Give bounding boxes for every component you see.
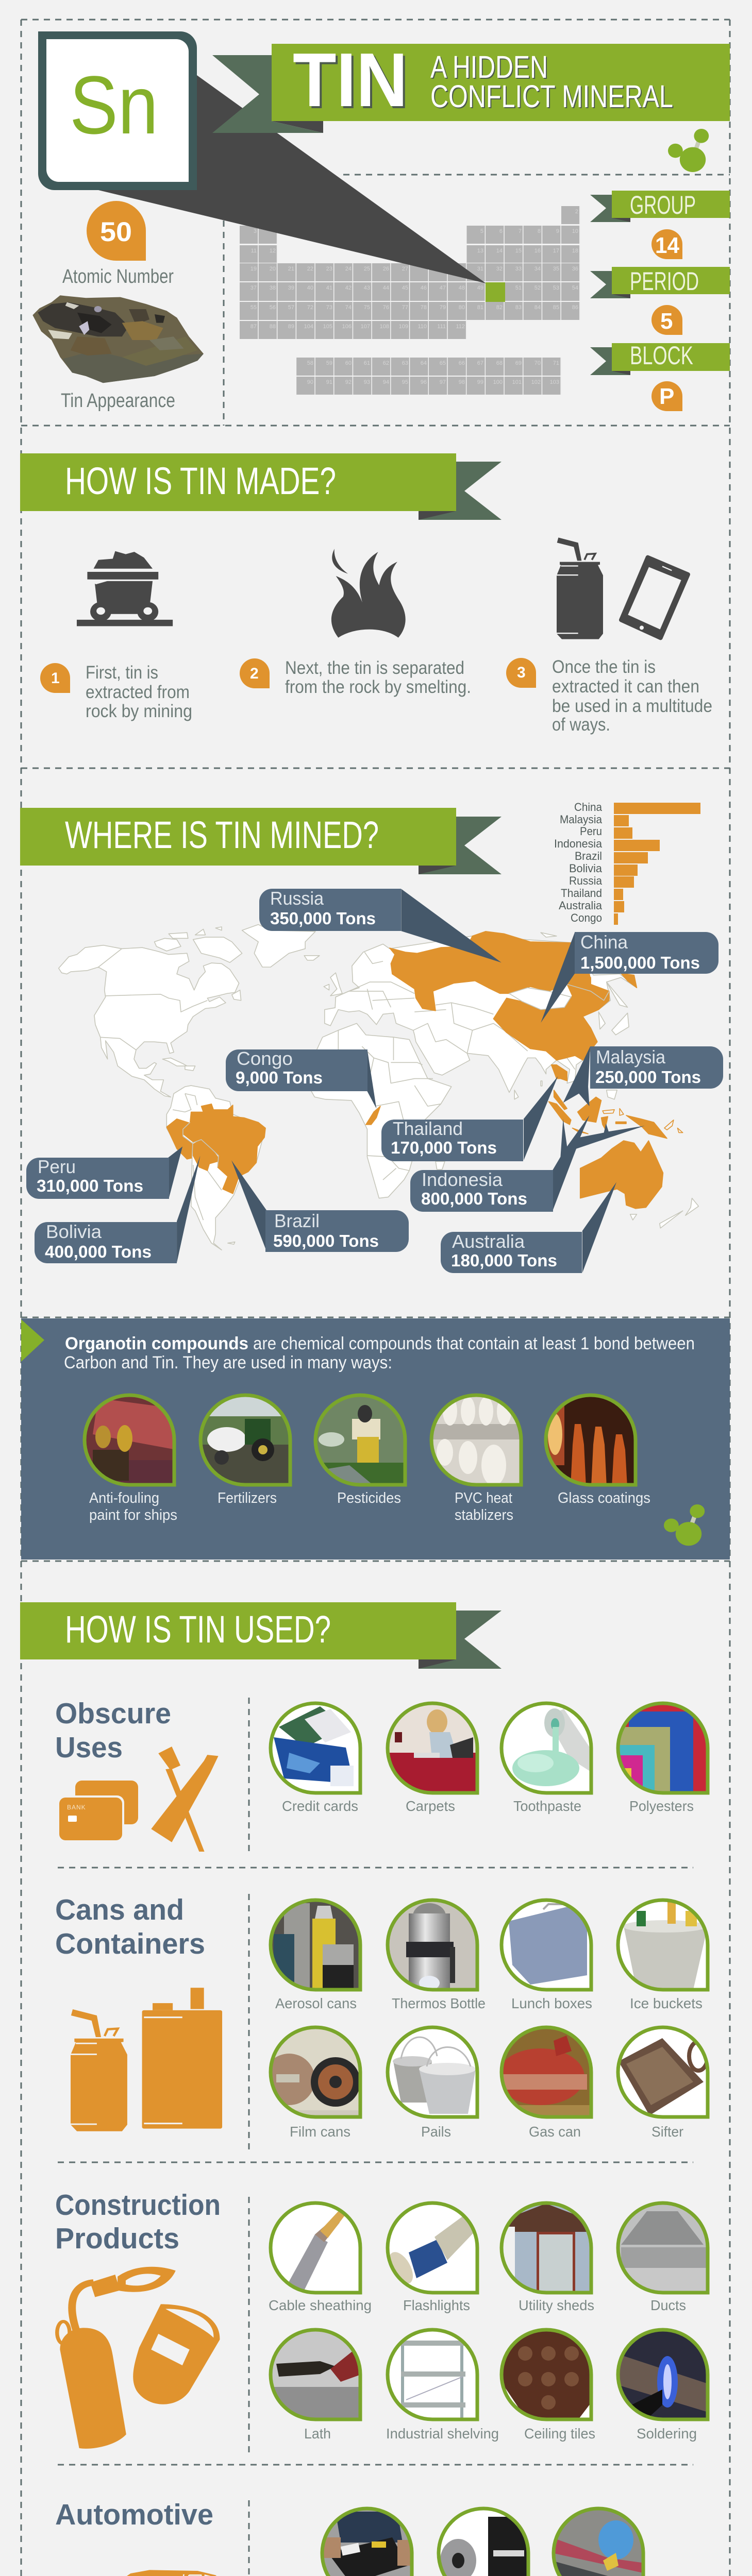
periodic table: 40 bbox=[307, 285, 313, 291]
periodic table: 48 bbox=[459, 285, 465, 291]
periodic table: 3 bbox=[254, 228, 257, 234]
periodic table: 17 bbox=[553, 248, 559, 254]
icon: toothbrush and toothpaste bbox=[151, 1747, 219, 1852]
step 1 bbox=[40, 663, 192, 721]
periodic table: 13 bbox=[477, 248, 483, 254]
periodic table: 73 bbox=[326, 304, 332, 311]
panel: obscure uses bbox=[55, 1697, 710, 1853]
icon: flame bbox=[331, 549, 406, 638]
item: sifter bbox=[616, 2025, 710, 2140]
periodic table: 100 bbox=[493, 379, 503, 385]
label: atomic number: Atomic Number bbox=[62, 266, 174, 287]
periodic table: 74 bbox=[345, 304, 352, 311]
item: flashlights bbox=[384, 2201, 479, 2313]
callout: Peru bbox=[26, 1146, 182, 1199]
callout: Peru: 310,000 Tons bbox=[37, 1176, 143, 1195]
step 3: extracted it can then bbox=[552, 676, 699, 697]
item: credit cards bbox=[269, 1701, 362, 1814]
item: ice buckets: Ice buckets bbox=[630, 1995, 703, 2011]
item: anti-fouling paint: Anti-fouling bbox=[89, 1490, 159, 1506]
periodic table: 7 bbox=[519, 228, 522, 234]
period ribbon bbox=[590, 267, 730, 298]
label: tin appearance: Tin Appearance bbox=[61, 390, 175, 412]
heading: Containers bbox=[55, 1927, 205, 1960]
icon: can bbox=[71, 2009, 127, 2131]
periodic table: 79 bbox=[440, 304, 446, 311]
bar chart: tin reserves by country: Bolivia bbox=[569, 862, 603, 875]
bar chart: tin reserves by country: Thailand bbox=[561, 887, 602, 900]
item: soldering: Soldering bbox=[637, 2426, 697, 2442]
title banner bbox=[212, 38, 730, 133]
icon: credit cards: BANK bbox=[67, 1804, 86, 1811]
item: fertilizers: Fertilizers bbox=[218, 1490, 277, 1506]
periodic table: 39 bbox=[288, 285, 294, 291]
icon: SUV bbox=[37, 2570, 236, 2576]
item: industrial shelving bbox=[386, 2328, 499, 2442]
group value badge: 14 bbox=[655, 233, 679, 258]
periodic table: 97 bbox=[440, 379, 446, 385]
heading: how is tin used bbox=[20, 1602, 502, 1669]
bar chart: tin reserves by country: Malaysia bbox=[560, 813, 603, 826]
organotin intro text: Organotin compounds bbox=[65, 1334, 248, 1353]
periodic table: 108 bbox=[380, 324, 389, 330]
bar chart: tin reserves by country: Australia bbox=[559, 899, 603, 912]
item: pesticides bbox=[313, 1393, 407, 1506]
periodic table: 42 bbox=[345, 285, 352, 291]
item: pails: Pails bbox=[421, 2124, 451, 2140]
heading: where is tin mined bbox=[20, 808, 502, 874]
periodic table: 85 bbox=[553, 304, 559, 311]
group ribbon: GROUP bbox=[630, 191, 696, 219]
heading: how is tin made: HOW IS TIN MADE? bbox=[65, 460, 336, 502]
item: lath bbox=[269, 2328, 362, 2442]
callout: Thailand: Thailand bbox=[393, 1118, 463, 1139]
item: PVC heat stabilizers: PVC heat bbox=[455, 1490, 512, 1506]
icon: welding helmet bbox=[133, 2304, 220, 2404]
item: ducts: Ducts bbox=[650, 2297, 686, 2313]
item: aerosol cans bbox=[269, 1898, 362, 2011]
tin rock illustration bbox=[32, 295, 204, 383]
item: lunch boxes bbox=[499, 1898, 593, 2011]
item: utility sheds bbox=[499, 2201, 594, 2313]
periodic table: 8 bbox=[538, 228, 541, 234]
periodic table: 16 bbox=[534, 248, 541, 254]
periodic table: 32 bbox=[496, 266, 503, 272]
item: lunch boxes: Lunch boxes bbox=[511, 1995, 592, 2011]
panel: construction products bbox=[55, 2189, 710, 2455]
item: gas can: Gas can bbox=[529, 2124, 581, 2140]
icon: fuel can bbox=[142, 1988, 222, 2129]
periodic table: 23 bbox=[326, 266, 332, 272]
step 2: 2 bbox=[250, 665, 259, 682]
periodic table: 93 bbox=[364, 379, 370, 385]
bar chart: tin reserves by country: Brazil bbox=[575, 850, 602, 862]
periodic table: 52 bbox=[534, 285, 541, 291]
organotin intro text: Carbon and Tin. They are used in many ways: bbox=[64, 1353, 392, 1372]
item: lath: Lath bbox=[304, 2426, 331, 2442]
periodic table: 22 bbox=[307, 266, 313, 272]
item: ducts bbox=[616, 2201, 710, 2313]
periodic table: 71 bbox=[553, 360, 559, 366]
periodic table: 44 bbox=[383, 285, 389, 291]
item: credit cards: Credit cards bbox=[282, 1798, 358, 1814]
heading bbox=[55, 1697, 171, 1764]
periodic table: 107 bbox=[361, 324, 370, 330]
callout: Bolivia bbox=[35, 1156, 200, 1263]
bar chart: tin reserves by country: Peru bbox=[580, 825, 602, 838]
periodic table: 106 bbox=[342, 324, 352, 330]
periodic table: 66 bbox=[459, 360, 465, 366]
callout: Malaysia: Malaysia bbox=[596, 1046, 666, 1067]
periodic table: 103 bbox=[550, 379, 559, 385]
element tile: Sn bbox=[38, 31, 197, 190]
callout: Thailand: 170,000 Tons bbox=[391, 1138, 497, 1157]
periodic table: 5 bbox=[480, 228, 483, 234]
periodic table: 82 bbox=[496, 304, 503, 311]
icon: molecule bbox=[664, 1504, 705, 1546]
periodic table: 21 bbox=[288, 266, 294, 272]
item: film cans bbox=[263, 2025, 362, 2140]
callout: China: China bbox=[580, 931, 628, 953]
periodic table: 31 bbox=[477, 266, 483, 272]
heading: where is tin mined: WHERE IS TIN MINED? bbox=[65, 814, 379, 856]
periodic table: 105 bbox=[323, 324, 332, 330]
periodic table: 41 bbox=[326, 285, 332, 291]
periodic table: 36 bbox=[572, 266, 578, 272]
periodic table: 47 bbox=[440, 285, 446, 291]
periodic table: 64 bbox=[421, 360, 427, 366]
step 3: be used in a multitude bbox=[552, 696, 712, 716]
heading: how is tin made bbox=[20, 453, 502, 520]
period value badge bbox=[651, 305, 682, 335]
step 1: First, tin is bbox=[86, 663, 158, 683]
callout: China bbox=[541, 931, 718, 1023]
icon: blowtorch bbox=[57, 2267, 176, 2449]
periodic table: 111 bbox=[437, 324, 446, 330]
item: polyesters: Polyesters bbox=[629, 1798, 694, 1814]
periodic table: 24 bbox=[345, 266, 352, 272]
callout: Thailand bbox=[381, 1076, 558, 1161]
callout: Russia: Russia bbox=[270, 888, 324, 909]
periodic table: 101 bbox=[512, 379, 522, 385]
step 2 bbox=[240, 658, 471, 697]
callout: Congo: Congo bbox=[237, 1048, 293, 1069]
callout: Brazil: 590,000 Tons bbox=[273, 1231, 379, 1250]
heading bbox=[55, 1893, 205, 1960]
callout: Australia: 180,000 Tons bbox=[451, 1251, 557, 1270]
periodic table: 54 bbox=[572, 285, 578, 291]
panel: organotin compounds bbox=[21, 1317, 730, 1561]
heading: Uses bbox=[55, 1731, 123, 1764]
item: PVC heat stabilizers bbox=[429, 1393, 523, 1523]
title banner: CONFLICT MINERAL bbox=[430, 79, 673, 114]
panel: cans and containers bbox=[55, 1893, 710, 2153]
periodic table: 11 bbox=[251, 248, 257, 254]
callout: Bolivia: Bolivia bbox=[46, 1221, 102, 1242]
callout: China: 1,500,000 Tons bbox=[580, 953, 700, 972]
bar chart: tin reserves by country: Congo bbox=[571, 911, 602, 924]
atomic number badge: 50 bbox=[100, 217, 132, 247]
icon: can and phone bbox=[557, 537, 688, 639]
callout: Congo bbox=[226, 1048, 376, 1109]
periodic table: 78 bbox=[421, 304, 427, 311]
item: pesticides: Pesticides bbox=[337, 1490, 401, 1506]
periodic table bbox=[240, 206, 580, 395]
periodic table: 10 bbox=[572, 228, 578, 234]
callout: Australia: Australia bbox=[452, 1231, 525, 1252]
block value badge bbox=[651, 381, 682, 411]
periodic table: 72 bbox=[307, 304, 313, 311]
item: pails bbox=[386, 2025, 479, 2140]
block value badge: P bbox=[659, 384, 674, 409]
callout: Brazil: Brazil bbox=[274, 1210, 320, 1231]
callout: Indonesia bbox=[410, 1115, 645, 1212]
callout: Congo: 9,000 Tons bbox=[236, 1068, 323, 1087]
periodic table: 92 bbox=[345, 379, 352, 385]
icon: molecule bbox=[668, 129, 709, 172]
item: glass coatings: Glass coatings bbox=[558, 1490, 650, 1506]
item: industrial shelving: Industrial shelving bbox=[386, 2426, 499, 2442]
periodic table: 25 bbox=[364, 266, 370, 272]
world map bbox=[59, 925, 698, 1250]
step 1: rock by mining bbox=[86, 701, 192, 721]
periodic table: 112 bbox=[456, 324, 465, 330]
periodic table: 86 bbox=[572, 304, 578, 311]
item: carpets bbox=[386, 1701, 479, 1814]
organotin intro text bbox=[64, 1334, 695, 1372]
heading bbox=[55, 2189, 221, 2255]
periodic table: 33 bbox=[515, 266, 522, 272]
periodic table: 109 bbox=[399, 324, 408, 330]
periodic table: 89 bbox=[288, 324, 294, 330]
period ribbon: PERIOD bbox=[630, 267, 699, 296]
callout: Indonesia: Indonesia bbox=[422, 1169, 503, 1190]
periodic table: 88 bbox=[270, 324, 276, 330]
periodic table: 90 bbox=[307, 379, 313, 385]
callout: Russia bbox=[259, 888, 502, 962]
step 3 bbox=[506, 657, 712, 735]
bar chart: tin reserves by country: Indonesia bbox=[554, 837, 603, 850]
step 2: from the rock by smelting. bbox=[285, 677, 471, 697]
item: ice buckets bbox=[616, 1898, 710, 2011]
periodic table: 102 bbox=[531, 379, 541, 385]
bar chart: tin reserves by country bbox=[554, 801, 700, 925]
atomic number badge bbox=[87, 201, 146, 261]
callout: Russia: 350,000 Tons bbox=[270, 909, 376, 928]
periodic table: 68 bbox=[496, 360, 503, 366]
heading: Products bbox=[55, 2222, 179, 2255]
periodic table: 27 bbox=[402, 266, 408, 272]
periodic table: 9 bbox=[556, 228, 559, 234]
item: gas can bbox=[497, 2025, 593, 2140]
group value badge bbox=[651, 229, 682, 259]
period value badge: 5 bbox=[660, 309, 673, 334]
item: PVC heat stabilizers: stablizers bbox=[455, 1507, 513, 1523]
periodic table: 67 bbox=[477, 360, 483, 366]
periodic table: 60 bbox=[345, 360, 352, 366]
periodic table: 6 bbox=[499, 228, 503, 234]
bar chart: tin reserves by country: Russia bbox=[569, 874, 603, 887]
callout: Peru: Peru bbox=[38, 1156, 76, 1177]
periodic table: 95 bbox=[402, 379, 408, 385]
item: toothpaste: Toothpaste bbox=[513, 1798, 581, 1814]
item: anti-fouling paint: paint for ships bbox=[89, 1507, 177, 1523]
item: cable sheathing: Cable sheathing bbox=[269, 2297, 372, 2313]
heading: Obscure bbox=[55, 1697, 171, 1730]
heading: Cans and bbox=[55, 1893, 184, 1926]
step 3: Once the tin is bbox=[552, 657, 656, 677]
periodic table: 75 bbox=[364, 304, 370, 311]
group ribbon bbox=[590, 191, 730, 222]
periodic table: 110 bbox=[417, 324, 427, 330]
periodic table: 87 bbox=[250, 324, 257, 330]
block ribbon: BLOCK bbox=[630, 341, 693, 370]
periodic table: 104 bbox=[304, 324, 313, 330]
item: oil filters bbox=[437, 2506, 530, 2576]
periodic table: 98 bbox=[459, 379, 465, 385]
step 3: 3 bbox=[517, 664, 526, 681]
step 2: Next, the tin is separated bbox=[285, 658, 464, 678]
periodic table: 53 bbox=[553, 285, 559, 291]
panel: automotive bbox=[37, 2498, 662, 2576]
periodic table: 84 bbox=[534, 304, 541, 311]
item: battery tops bbox=[320, 2506, 414, 2576]
periodic table: 76 bbox=[383, 304, 389, 311]
callout: Indonesia: 800,000 Tons bbox=[421, 1189, 527, 1208]
periodic table: 4 bbox=[273, 228, 276, 234]
callout: Malaysia bbox=[563, 1046, 723, 1106]
heading: Automotive bbox=[55, 2498, 213, 2531]
callout: Malaysia: 250,000 Tons bbox=[595, 1067, 701, 1087]
item: anti-fouling paint bbox=[82, 1393, 177, 1523]
periodic table: 15 bbox=[515, 248, 522, 254]
periodic table: 57 bbox=[288, 304, 294, 311]
periodic table: 56 bbox=[270, 304, 276, 311]
item: film cans: Film cans bbox=[290, 2124, 350, 2140]
periodic table: 43 bbox=[364, 285, 370, 291]
item: ceiling tiles: Ceiling tiles bbox=[524, 2426, 595, 2442]
periodic table: 80 bbox=[459, 304, 465, 311]
periodic table: 51 bbox=[515, 285, 522, 291]
periodic table: 55 bbox=[250, 304, 257, 311]
step 3: of ways. bbox=[552, 715, 610, 735]
icon: mine cart bbox=[77, 551, 173, 626]
item: cable sheathing bbox=[269, 2201, 372, 2313]
periodic table: 37 bbox=[250, 285, 257, 291]
periodic table: 77 bbox=[402, 304, 408, 311]
item: thermos bottle bbox=[386, 1898, 486, 2011]
item: aerosol cans: Aerosol cans bbox=[275, 1995, 357, 2011]
periodic table: 91 bbox=[326, 379, 332, 385]
periodic table: 59 bbox=[326, 360, 332, 366]
periodic table: 18 bbox=[572, 248, 578, 254]
title banner: TIN bbox=[293, 38, 408, 123]
organotin intro text: are chemical compounds that contain at least 1 bond between bbox=[253, 1334, 695, 1353]
item: fertilizers bbox=[198, 1393, 292, 1506]
periodic table: 99 bbox=[477, 379, 483, 385]
periodic table: 14 bbox=[496, 248, 503, 254]
periodic table: 58 bbox=[307, 360, 313, 366]
bar chart: tin reserves by country: China bbox=[574, 801, 603, 814]
pointer wedge from element tile to tin cell bbox=[98, 75, 486, 283]
element tile: Sn: Sn bbox=[70, 59, 158, 151]
periodic table: 61 bbox=[364, 360, 370, 366]
step 1: extracted from bbox=[86, 682, 190, 702]
periodic table: 38 bbox=[270, 285, 276, 291]
item: soldering bbox=[616, 2328, 710, 2442]
periodic table: 62 bbox=[383, 360, 389, 366]
item: thermos bottle: Thermos Bottle bbox=[392, 1995, 486, 2011]
callout: Brazil bbox=[231, 1160, 409, 1252]
periodic table: 26 bbox=[383, 266, 389, 272]
item: polyesters bbox=[616, 1701, 710, 1814]
block ribbon bbox=[590, 341, 730, 375]
heading: how is tin used: HOW IS TIN USED? bbox=[65, 1608, 331, 1651]
periodic table: 83 bbox=[515, 304, 522, 311]
item: ceiling tiles bbox=[499, 2328, 595, 2442]
periodic table: 96 bbox=[421, 379, 427, 385]
periodic table: 2 bbox=[575, 209, 578, 215]
heading: Construction bbox=[55, 2189, 221, 2222]
periodic table: 70 bbox=[534, 360, 541, 366]
step 1: 1 bbox=[51, 670, 60, 687]
icon: credit cards bbox=[57, 1781, 138, 1842]
periodic table: 45 bbox=[402, 285, 408, 291]
periodic table: 49 bbox=[477, 285, 483, 291]
item: flashlights: Flashlights bbox=[403, 2297, 470, 2313]
item: car trim bbox=[552, 2506, 645, 2576]
callout: Australia bbox=[441, 1182, 616, 1273]
periodic table: 65 bbox=[440, 360, 446, 366]
callout: Bolivia: 400,000 Tons bbox=[45, 1242, 152, 1261]
periodic table: 12 bbox=[270, 248, 276, 254]
periodic table: 81 bbox=[477, 304, 483, 311]
periodic table: 69 bbox=[515, 360, 522, 366]
periodic table: 35 bbox=[553, 266, 559, 272]
periodic table: 94 bbox=[383, 379, 389, 385]
item: toothpaste bbox=[499, 1701, 593, 1814]
title banner: A HIDDEN bbox=[430, 49, 548, 84]
item: glass coatings bbox=[544, 1393, 650, 1506]
highlighted tin cell bbox=[486, 282, 505, 302]
periodic table: 34 bbox=[534, 266, 541, 272]
item: carpets: Carpets bbox=[406, 1798, 455, 1814]
item: sifter: Sifter bbox=[651, 2124, 683, 2140]
periodic table: 19 bbox=[250, 266, 257, 272]
periodic table: 46 bbox=[421, 285, 427, 291]
periodic table: 63 bbox=[402, 360, 408, 366]
periodic table: 20 bbox=[270, 266, 276, 272]
item: utility sheds: Utility sheds bbox=[519, 2297, 594, 2313]
